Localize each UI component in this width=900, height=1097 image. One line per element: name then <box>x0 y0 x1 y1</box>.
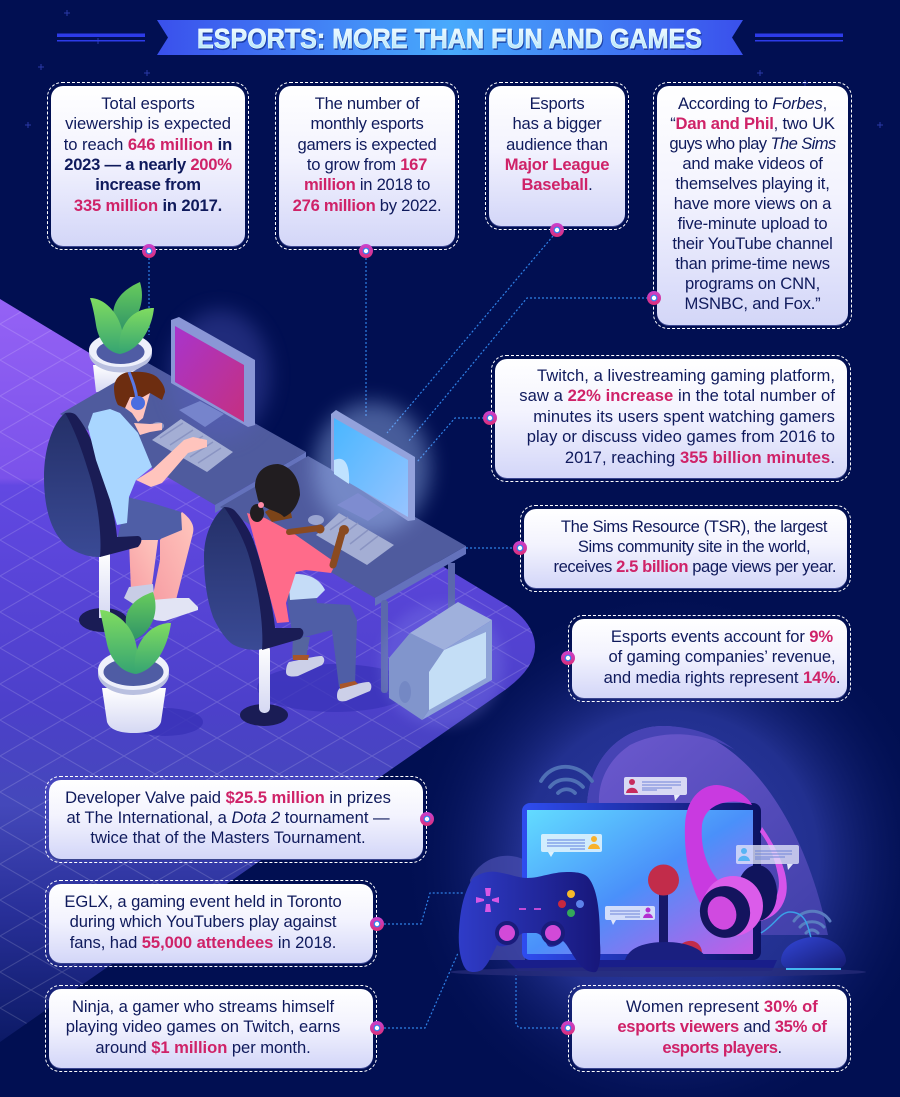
text block: 2017, reaching 355 billion minutes. <box>565 448 835 466</box>
text block: to reach 646 million in <box>64 135 232 154</box>
title banner: ESPORTS: MORE THAN FUN AND GAMES <box>198 24 703 56</box>
text block: 335 million in 2017. <box>74 196 222 215</box>
text block: to grow from 167 <box>307 155 427 174</box>
text block: MSNBC, and Fox.” <box>684 294 821 313</box>
text block <box>669 94 836 313</box>
text block: at The International, a Dota 2 tournament — <box>66 808 390 827</box>
text block: playing video games on Twitch, earns <box>66 1017 340 1036</box>
wifi symbol left <box>541 767 592 793</box>
chat bubble: red user <box>624 777 687 801</box>
text block: fans, had 55,000 attendees in 2018. <box>70 933 336 952</box>
text block: Esports <box>530 94 584 113</box>
chat bubble: purple user <box>605 906 655 925</box>
arms <box>289 528 320 532</box>
text block <box>65 788 391 847</box>
device group illustration <box>450 726 866 977</box>
text block: during which YouTubers play against <box>70 912 336 931</box>
text block <box>617 997 827 1057</box>
panel: Ninja earnings <box>45 985 377 1072</box>
text block: audience than <box>506 135 608 154</box>
text block: Ninja, a gamer who streams himself <box>72 997 334 1016</box>
front leg <box>152 512 193 600</box>
dotted connector lines <box>149 236 648 1028</box>
text block: gamers is expected <box>297 135 437 154</box>
laptop frame <box>522 803 761 960</box>
text block: receives 2.5 billion page views per year. <box>554 557 836 576</box>
panel: women in esports <box>568 985 851 1072</box>
face <box>125 393 150 422</box>
text block: has a bigger <box>513 114 601 133</box>
laptop screen <box>527 810 753 954</box>
text block: twice that of the Masters Tournament. <box>90 828 366 847</box>
text block: and media rights represent 14%. <box>604 668 840 687</box>
wifi symbol right <box>794 911 830 933</box>
chair pole and base <box>240 645 288 726</box>
text block: esports players. <box>662 1038 782 1057</box>
hair and ponytail <box>255 464 300 517</box>
text block: Women represent 30% of <box>626 997 818 1016</box>
face buttons <box>567 890 575 898</box>
title ornaments right <box>755 34 843 42</box>
panel: Twitch minutes <box>491 355 851 482</box>
text block <box>604 627 840 687</box>
text block: have more views on a <box>674 194 831 213</box>
back monitor <box>170 310 270 440</box>
isometric floor <box>0 290 540 1050</box>
title banner: ESPORTS: MORE THAN FUN AND GAMES <box>197 23 702 54</box>
text block <box>519 366 835 466</box>
glass dome <box>587 726 828 935</box>
text block: than prime-time news <box>675 254 830 273</box>
headphones <box>685 785 811 945</box>
smart speaker <box>781 937 846 970</box>
text block <box>64 892 342 952</box>
text block: their YouTube channel <box>672 234 833 253</box>
chair back <box>44 413 141 557</box>
front monitor <box>314 402 430 534</box>
speaker cable <box>761 912 811 938</box>
text block: Twitch, a livestreaming gaming platform, <box>537 366 835 384</box>
text block: viewership is expected <box>65 114 231 133</box>
text block: Major League <box>505 155 609 174</box>
back keyboard <box>152 419 233 472</box>
text block <box>554 516 836 576</box>
shoe <box>152 598 198 621</box>
text block: programs on CNN, <box>685 274 820 293</box>
front plant <box>98 592 171 733</box>
text block: five-minute upload to <box>678 214 827 233</box>
text block: saw a 22% increase in the total number of <box>519 386 835 405</box>
text block: play or discuss video games from 2016 to <box>527 427 835 446</box>
menu buttons <box>519 908 541 910</box>
text block: Total esports <box>101 94 195 113</box>
background glow behind devices <box>400 590 900 1097</box>
panel: EGLX attendees <box>45 880 377 967</box>
text block: Sims community site in the world, <box>578 537 810 556</box>
laptop base <box>507 960 777 971</box>
text block <box>293 94 441 215</box>
text block: 2023 — a nearly 200% <box>64 155 232 174</box>
rear leg <box>129 540 158 592</box>
front keyboard <box>308 513 394 565</box>
chair stripe and seat edge <box>224 507 303 650</box>
text block: According to Forbes, <box>678 94 827 113</box>
text block: increase from <box>95 175 201 194</box>
shirt <box>88 409 152 525</box>
text block <box>66 997 340 1057</box>
text block: “Dan and Phil, two UK <box>670 114 835 133</box>
shorts <box>117 497 182 540</box>
panel: bigger audience than baseball <box>485 82 629 230</box>
ghost shape behind controller <box>470 856 525 960</box>
text block: Developer Valve paid $25.5 million in prizes <box>65 788 391 806</box>
background stars <box>25 10 883 128</box>
panel: esports events revenue <box>568 615 851 702</box>
text block: Baseball. <box>521 175 593 194</box>
text block: esports viewers and 35% of <box>617 1017 827 1036</box>
game controller <box>459 872 600 972</box>
hair <box>114 372 165 408</box>
title ornaments left <box>57 34 145 42</box>
text block: The Sims Resource (TSR), the largest <box>561 516 827 536</box>
computer tower <box>380 602 504 727</box>
text block: of gaming companies’ revenue, <box>608 647 836 666</box>
headset <box>129 372 137 400</box>
text block <box>64 94 232 215</box>
joystick <box>625 864 707 960</box>
desk shadow <box>450 967 866 977</box>
back gamer <box>44 372 207 632</box>
text block: themselves playing it, <box>675 174 830 193</box>
thumbsticks <box>495 921 519 945</box>
text block: monthly esports <box>310 114 424 133</box>
neck <box>265 497 292 522</box>
text block: guys who play The Sims <box>669 134 836 153</box>
text block: Esports events account for 9% <box>611 627 833 646</box>
shirt <box>247 513 336 623</box>
panel: total esports viewership <box>47 82 249 250</box>
text block: around $1 million per month. <box>95 1038 311 1057</box>
text block: and make videos of <box>682 154 823 173</box>
pants and legs <box>292 637 310 658</box>
panel: Forbes quote <box>653 82 852 329</box>
text block <box>505 94 609 194</box>
front gamer <box>204 464 371 726</box>
text block: minutes its users spent watching gamers <box>533 406 835 426</box>
back desk <box>60 363 306 513</box>
arms <box>136 437 207 487</box>
panel: Valve prize money <box>45 776 427 863</box>
text block: EGLX, a gaming event held in Toronto <box>64 892 342 911</box>
back plant <box>89 282 154 392</box>
text block: 276 million by 2022. <box>293 196 441 215</box>
chat bubble: blue user <box>736 845 799 870</box>
chair back <box>204 507 303 650</box>
chair pole and base <box>79 552 127 632</box>
shoes <box>286 656 324 677</box>
panel: monthly esports gamers <box>275 82 459 250</box>
d-pad <box>476 888 499 912</box>
front desk <box>220 456 466 693</box>
text block: million in 2018 to <box>304 175 430 194</box>
chat bubble: orange user <box>541 834 602 857</box>
chair stripe and seat edge <box>65 413 141 557</box>
panel: The Sims Resource <box>520 505 851 592</box>
text block: The number of <box>315 94 419 113</box>
